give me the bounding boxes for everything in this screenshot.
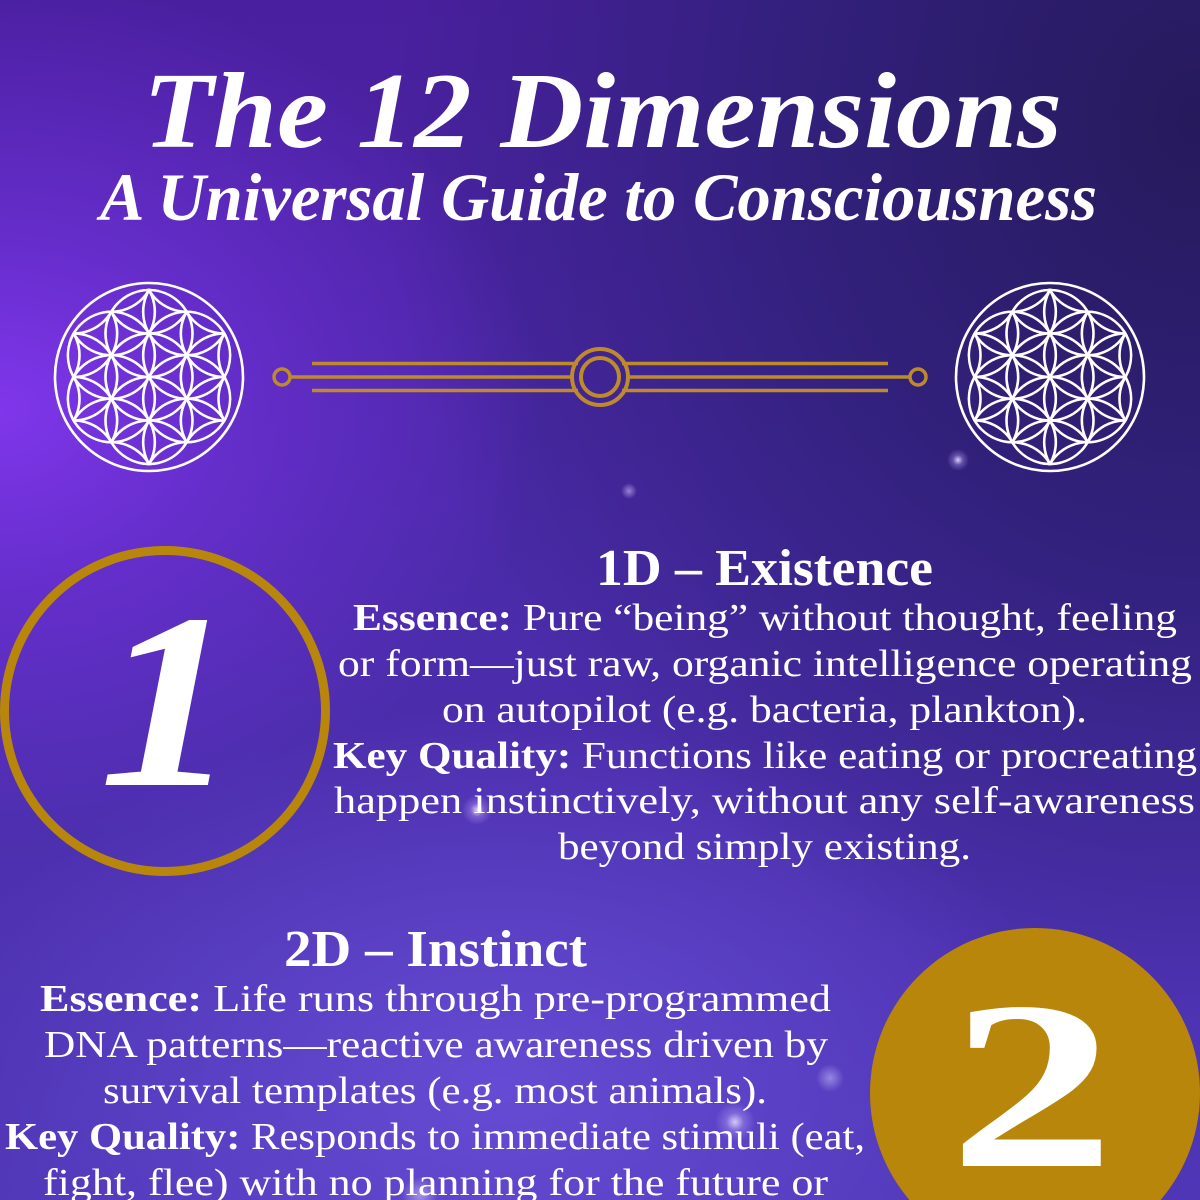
subtitle: A Universal Guide to Consciousness: [96, 159, 1097, 235]
body text 1D: beyond simply existing.: [558, 826, 971, 868]
title block: [96, 52, 1097, 235]
body text 2D: Key Quality: Responds to immediate stimuli (eat,: [5, 1116, 865, 1158]
main title: The 12 Dimensions: [143, 52, 1062, 171]
body text 2D: survival templates (e.g. most animals).: [103, 1070, 767, 1112]
icon: flower of life left: [0, 203, 306, 551]
body text 1D: happen instinctively, without any self-awareness: [334, 780, 1195, 822]
ornamental gold divider: [274, 349, 926, 405]
body text 1D: on autopilot (e.g. bacteria, plankton).: [442, 689, 1087, 731]
number badge 1: 1: [99, 563, 238, 840]
body text 2D: [5, 978, 865, 1200]
number badge 1: [4, 550, 326, 872]
body text 1D: Essence: Pure “being” without thought, feeling: [353, 597, 1177, 639]
number badge 2: [870, 928, 1200, 1200]
icon: flower of life right: [894, 203, 1200, 551]
heading 2D: 2D – Instinct: [284, 921, 588, 978]
heading 1D: 1D – Existence: [596, 540, 933, 597]
body text 1D: Key Quality: Functions like eating or procreating: [333, 735, 1197, 777]
section 1D: Existence: [333, 540, 1197, 868]
section 2D: Instinct: [5, 921, 865, 1200]
body text 2D: Essence: Life runs through pre-programmed: [40, 978, 831, 1020]
body text 2D: DNA patterns—reactive awareness driven by: [44, 1024, 828, 1066]
body text 1D: [333, 597, 1197, 868]
body text 1D: or form—just raw, organic intelligence operating: [338, 643, 1192, 685]
